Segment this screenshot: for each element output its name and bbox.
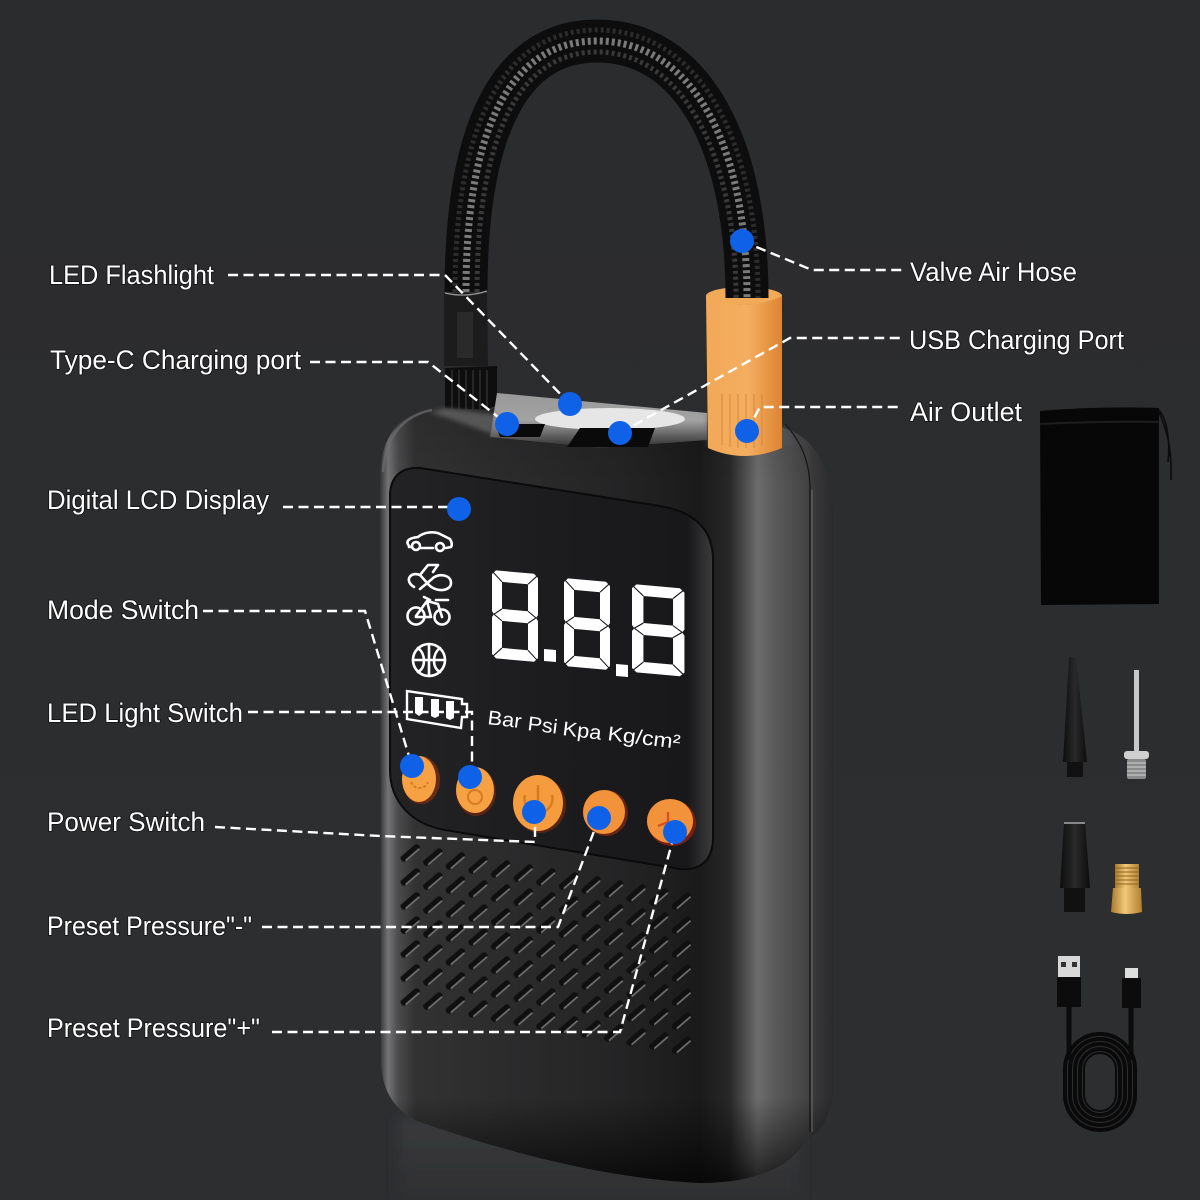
- pressure units: Kpa: [561, 718, 604, 745]
- mode icon: car: [407, 532, 452, 551]
- button: plus: [647, 799, 696, 846]
- top face with ports: [430, 393, 795, 448]
- product reflection: [398, 1118, 800, 1200]
- accessory: wide cone nozzle: [1060, 822, 1090, 912]
- pressure units: Psi: [526, 713, 559, 739]
- braided air hose: [455, 30, 758, 298]
- pressure readout 8.8.8: [492, 570, 684, 677]
- label: Preset Pressure plus: Preset Pressure"+": [47, 1013, 260, 1043]
- accessory: USB charging cable: [1057, 956, 1141, 1130]
- label: Digital LCD Display: Digital LCD Display: [47, 485, 269, 515]
- pressure units: Kg/cm²: [606, 723, 682, 754]
- orange air outlet sleeve: [706, 296, 782, 456]
- label: Valve Air Hose: Valve Air Hose: [910, 257, 1077, 287]
- label: Preset Pressure minus: Preset Pressure"-": [47, 911, 252, 941]
- USB port: [567, 428, 655, 447]
- speaker grille: [399, 839, 693, 1059]
- label: LED Light Switch: LED Light Switch: [47, 698, 243, 728]
- button: power: [513, 775, 566, 833]
- label: USB Charging Port: USB Charging Port: [909, 325, 1124, 355]
- pressure units: Bar: [486, 707, 523, 733]
- accessory: inflation needle: [1124, 670, 1149, 779]
- label: LED Flashlight: LED Flashlight: [49, 260, 214, 290]
- callout leader lines: [203, 241, 902, 1032]
- button: mode: [402, 756, 440, 804]
- battery indicator: [407, 691, 467, 728]
- mode icon: basketball: [413, 644, 445, 676]
- mode icon: motorcycle: [409, 565, 451, 590]
- callout markers: [400, 229, 759, 844]
- accessory: ball needle cone nozzle: [1063, 657, 1087, 777]
- pressure units: [486, 707, 682, 754]
- label: Mode Switch: Mode Switch: [47, 595, 199, 625]
- LCD display panel: [390, 468, 713, 869]
- air pump device: [380, 30, 833, 1183]
- label: Air Outlet: Air Outlet: [910, 397, 1022, 427]
- accessory: storage pouch: [1040, 407, 1171, 605]
- accessory: brass valve adapter: [1111, 864, 1142, 914]
- button: LED light: [456, 767, 496, 816]
- mode icon: bicycle: [408, 597, 450, 624]
- sleeve back rim: [706, 287, 782, 305]
- label: Type-C Charging port: Type-C Charging port: [50, 345, 301, 375]
- button: minus: [583, 790, 628, 836]
- hose connector and knurled nut: [444, 291, 497, 413]
- USB-C port: [495, 424, 545, 437]
- label: Power Switch: Power Switch: [47, 807, 205, 837]
- pump body: [380, 408, 833, 1183]
